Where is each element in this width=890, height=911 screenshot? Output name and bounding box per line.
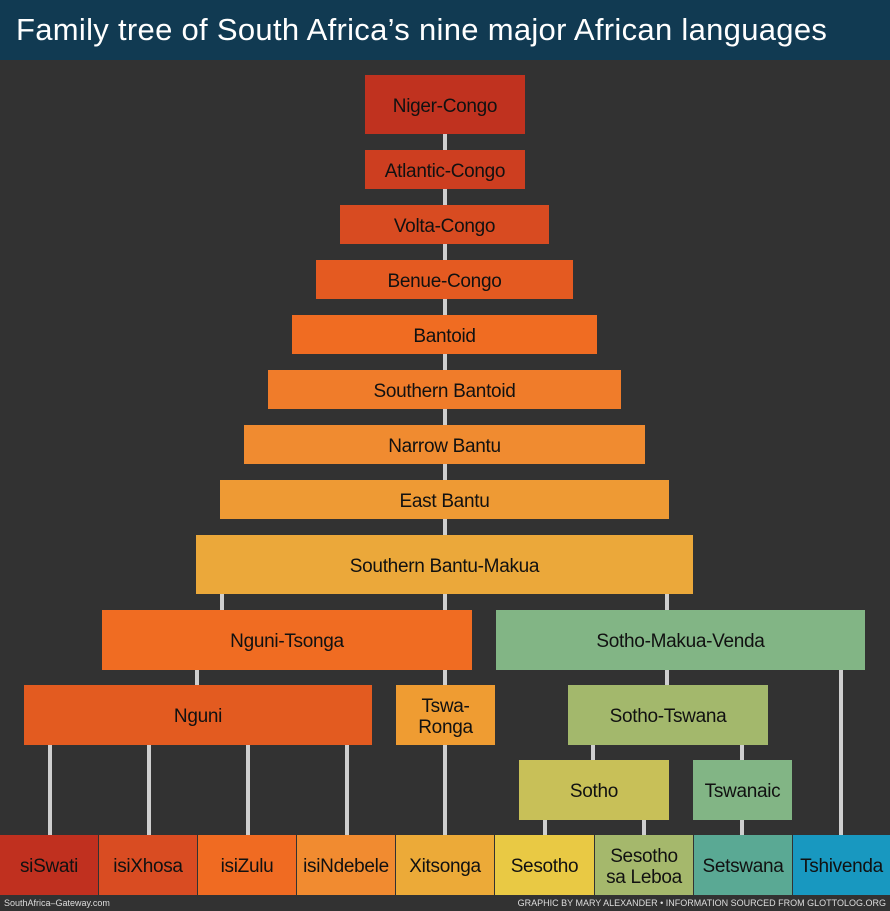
lang: isiXhosa: isiXhosa: [113, 856, 183, 877]
lang: isiXhosa: [99, 835, 197, 895]
node: Nguni-Tsonga: Nguni-Tsonga: [230, 631, 344, 652]
node: Tswa-Ronga: Ronga: [418, 716, 473, 738]
lang: Sesotho: Sesotho: [511, 856, 578, 877]
node: Niger-Congo: Niger-Congo: [393, 96, 497, 116]
node: Narrow Bantu: [244, 425, 645, 464]
lang: Tshivenda: Tshivenda: [800, 856, 883, 877]
lang: Sesotho sa Leboa: Sesotho: [610, 846, 678, 866]
node: Niger-Congo: [365, 75, 525, 134]
node: East Bantu: East Bantu: [400, 490, 489, 512]
title: Family tree of South Africa’s nine major African languages: [16, 12, 827, 47]
node: Tswa-Ronga: Tswa-: [421, 696, 470, 716]
lang: isiZulu: isiZulu: [221, 856, 273, 877]
node: Bantoid: [292, 315, 597, 354]
node: Benue-Congo: [316, 260, 573, 299]
lang: Xitsonga: [396, 835, 494, 895]
lang: Sesotho sa Leboa: [595, 835, 693, 895]
node: Nguni: Nguni: [174, 706, 222, 727]
lang: Setswana: [694, 835, 792, 895]
node: Nguni-Tsonga: [102, 610, 472, 670]
lang: Setswana: Setswana: [702, 856, 784, 877]
node: Volta-Congo: Volta-Congo: [394, 216, 495, 236]
lang: isiZulu: [198, 835, 296, 895]
node: Atlantic-Congo: Atlantic-Congo: [385, 160, 505, 182]
lang: isiNdebele: [297, 835, 395, 895]
node: Tswa-Ronga: [396, 685, 495, 745]
lang: siSwati: [0, 835, 98, 895]
node: Southern Bantu-Makua: Southern Bantu-Makua: [350, 556, 539, 576]
footer left: SouthAfrica–Gateway.com: [4, 898, 110, 908]
node: Atlantic-Congo: [365, 150, 525, 189]
node: Tswanaic: [693, 760, 792, 820]
node: Sotho-Tswana: Sotho-Tswana: [610, 706, 726, 727]
node: Volta-Congo: [340, 205, 549, 244]
node: East Bantu: [220, 480, 669, 519]
node: Nguni: [24, 685, 372, 745]
node: Benue-Congo: Benue-Congo: [388, 270, 501, 292]
node: Sotho-Makua-Venda: [496, 610, 865, 670]
title: [0, 0, 890, 60]
lang: Xitsonga: Xitsonga: [409, 856, 481, 877]
languages row: [0, 835, 890, 895]
node: Southern Bantu-Makua: [196, 535, 693, 594]
lang: isiNdebele: isiNdebele: [303, 856, 389, 877]
node: Southern Bantoid: [268, 370, 621, 409]
lang: siSwati: siSwati: [20, 856, 78, 877]
node: Sotho: Sotho: [570, 781, 618, 802]
node: Sotho: [519, 760, 669, 820]
node: Sotho-Tswana: [568, 685, 768, 745]
lang: Sesotho: [495, 835, 594, 895]
node: Southern Bantoid: Southern Bantoid: [373, 380, 516, 402]
node: Bantoid: Bantoid: [413, 326, 476, 346]
footer right: GRAPHIC BY MARY ALEXANDER • INFORMATION SOURCED FROM GLOTTOLOG.ORG: [518, 898, 886, 908]
node: Narrow Bantu: Narrow Bantu: [388, 436, 501, 456]
node: Sotho-Makua-Venda: Sotho-Makua-Venda: [596, 631, 765, 652]
lang: Tshivenda: [793, 835, 890, 895]
lang: Sesotho sa Leboa: sa Leboa: [606, 866, 682, 888]
node: Tswanaic: Tswanaic: [705, 781, 780, 802]
